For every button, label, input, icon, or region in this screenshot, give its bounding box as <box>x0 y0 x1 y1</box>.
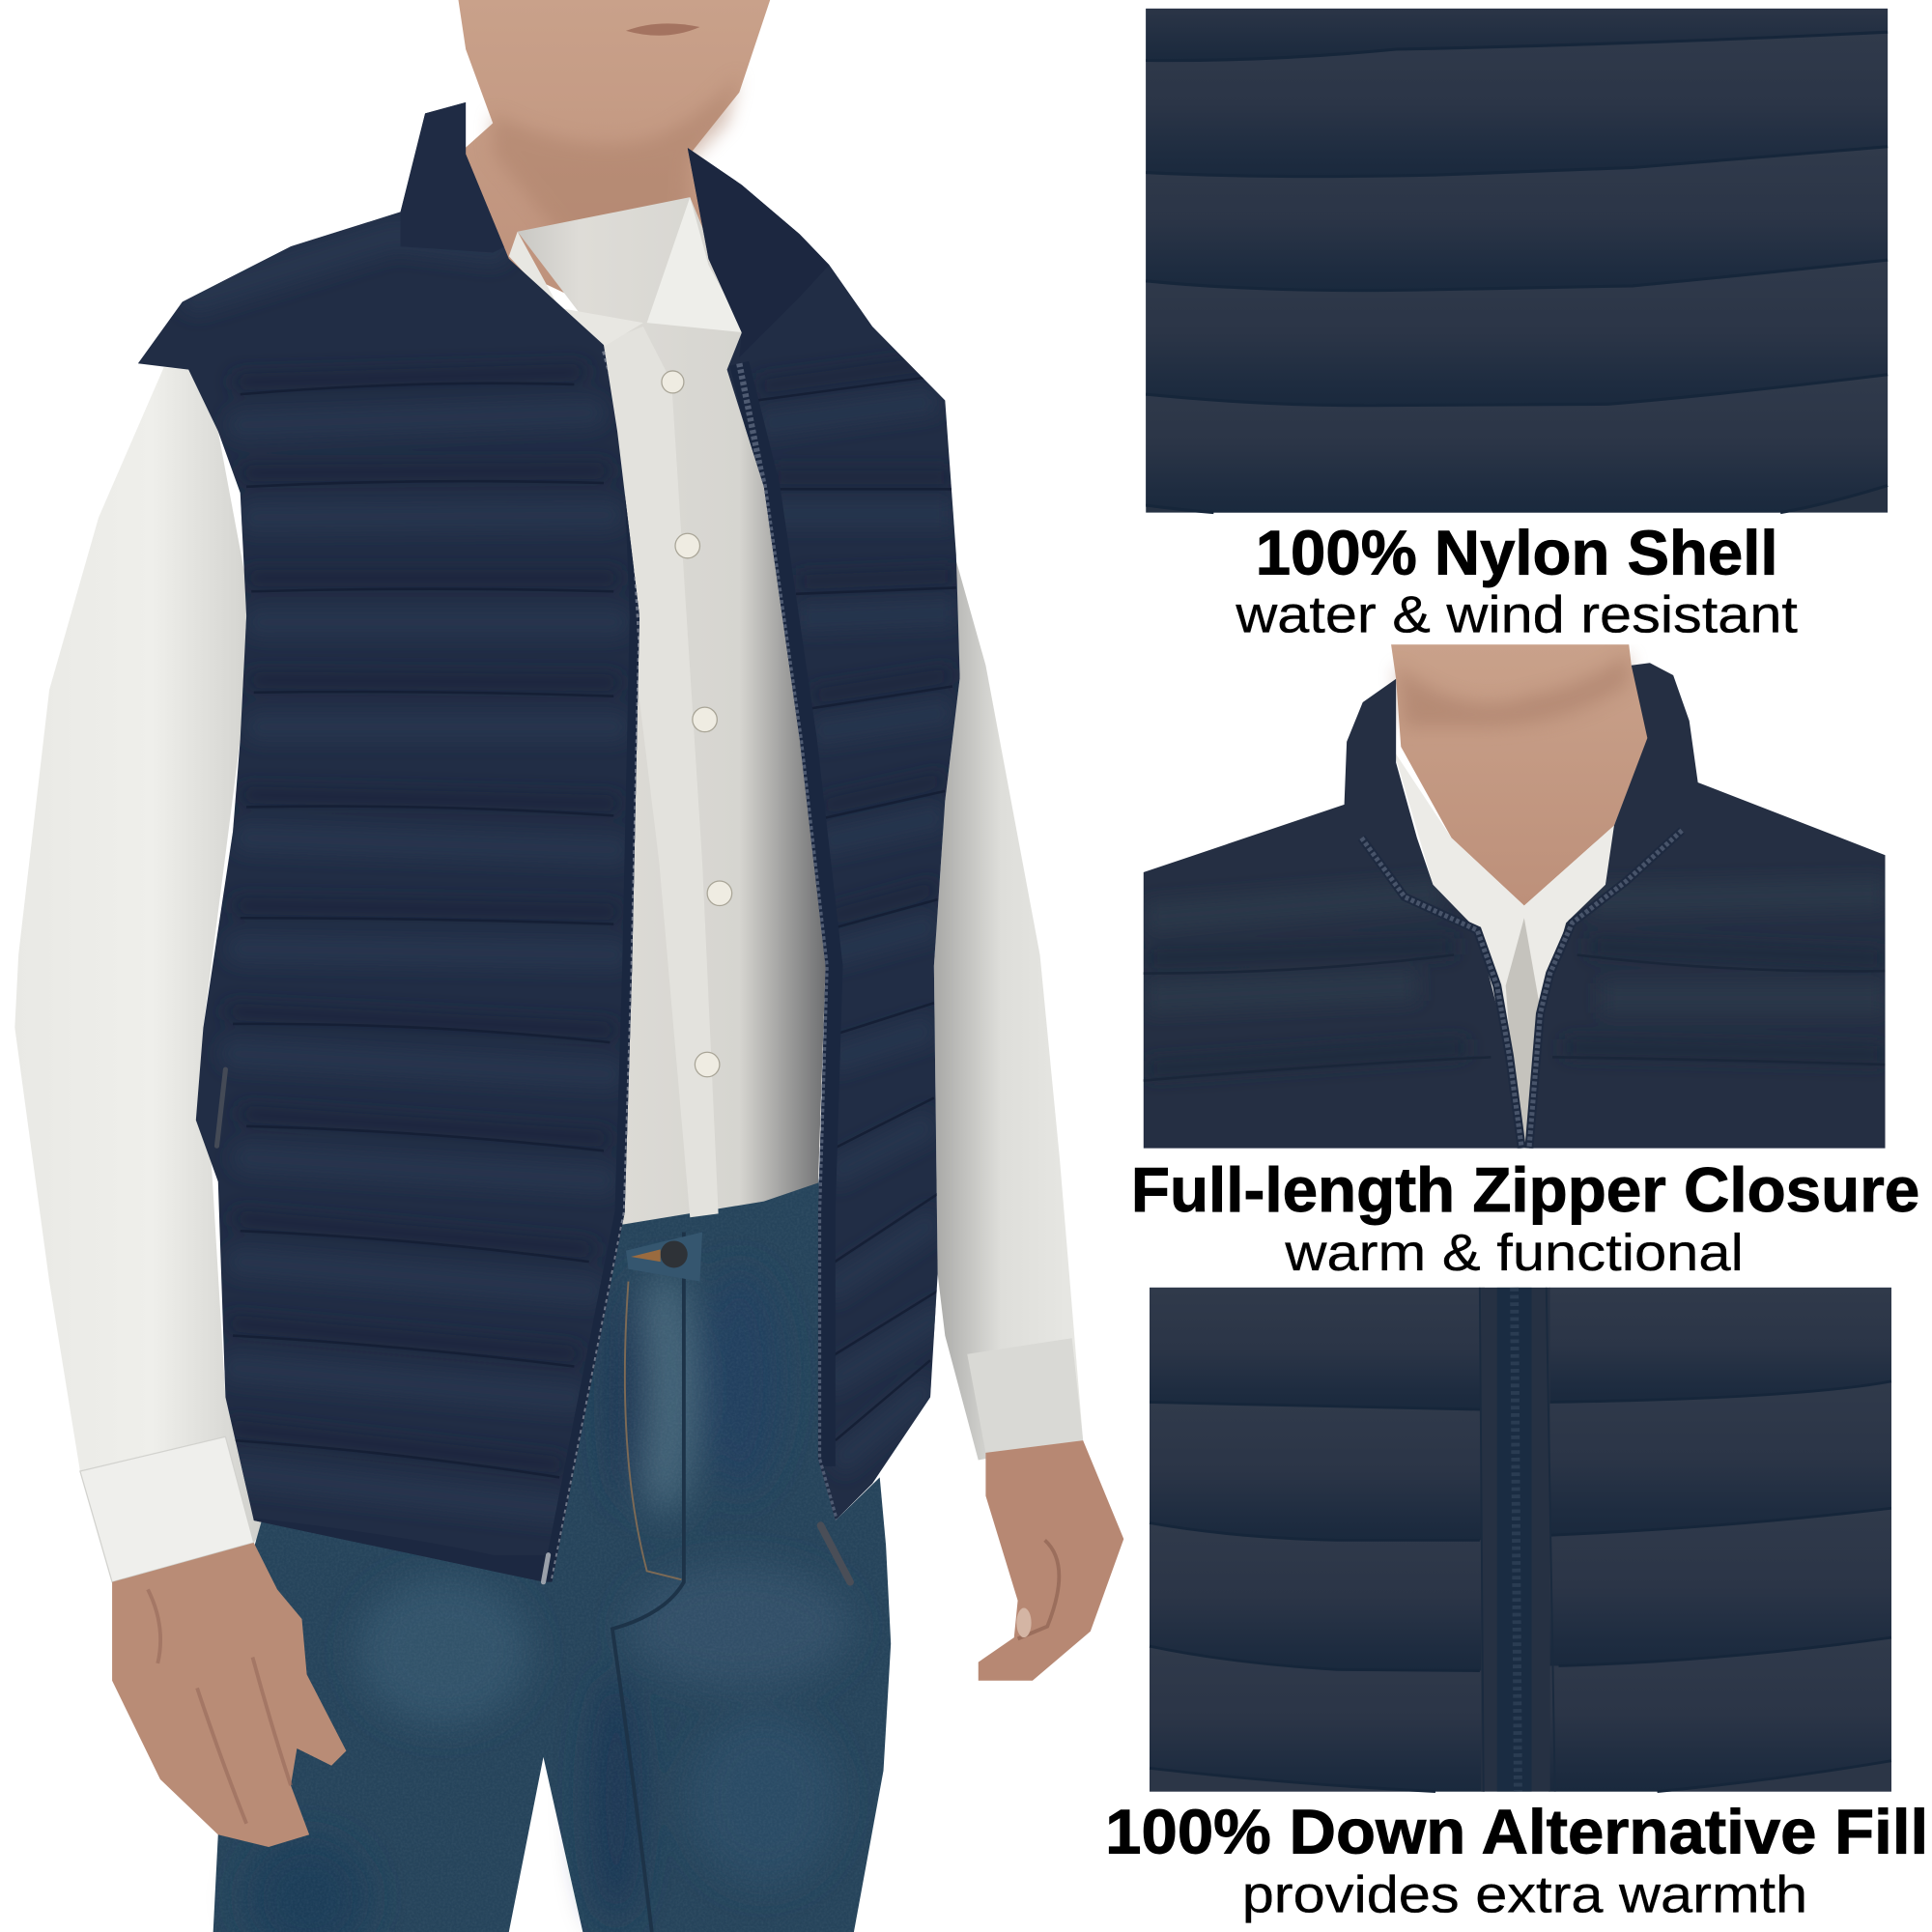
subheading: zipper closure: warm & functional <box>1284 1225 1744 1282</box>
heading: down alternative fill: 100% Down Alternative Fill <box>1105 1796 1928 1866</box>
neck <box>1391 644 1650 906</box>
vest hem band <box>253 1520 541 1581</box>
zipper teeth <box>1381 871 1642 1149</box>
jeans <box>213 1171 891 1932</box>
shirt front <box>509 197 826 1225</box>
panel: nylon shell closeup <box>1146 9 1888 513</box>
vest collar right <box>688 148 829 333</box>
left vest front <box>124 86 653 1602</box>
main photo: man wearing puffer vest <box>14 0 1123 1932</box>
vest collar left <box>400 102 504 253</box>
zipper placket <box>1481 1288 1550 1792</box>
panel: zipper closure closeup <box>1144 644 1886 1149</box>
subheading: down alternative fill: provides extra warmth <box>1242 1867 1807 1924</box>
puff bands <box>1150 1288 1891 1792</box>
puff bands <box>1146 9 1888 513</box>
heading: nylon shell: 100% Nylon Shell <box>1256 517 1778 587</box>
left sleeve <box>14 367 265 1582</box>
shirt buttons <box>662 371 732 1077</box>
panel: down alternative fill closeup <box>1150 1288 1891 1792</box>
zipper teeth <box>1497 1288 1531 1792</box>
face and neck <box>458 0 770 330</box>
zipper pulls <box>216 1069 850 1582</box>
vest body <box>1144 663 1886 1149</box>
left zipper placket <box>552 419 639 1582</box>
jeans button <box>631 1240 688 1267</box>
heading: zipper closure: Full-length Zipper Closure <box>1131 1154 1919 1225</box>
shirt collar <box>1396 753 1615 1027</box>
left hand <box>112 1543 346 1847</box>
right hand <box>979 1440 1123 1681</box>
right vest front <box>688 148 960 1520</box>
right cuff <box>967 1338 1083 1453</box>
left cuff <box>80 1436 254 1582</box>
subheading: nylon shell: water & wind resistant <box>1235 586 1798 643</box>
right zipper <box>739 363 833 1466</box>
right sleeve <box>934 560 1083 1460</box>
